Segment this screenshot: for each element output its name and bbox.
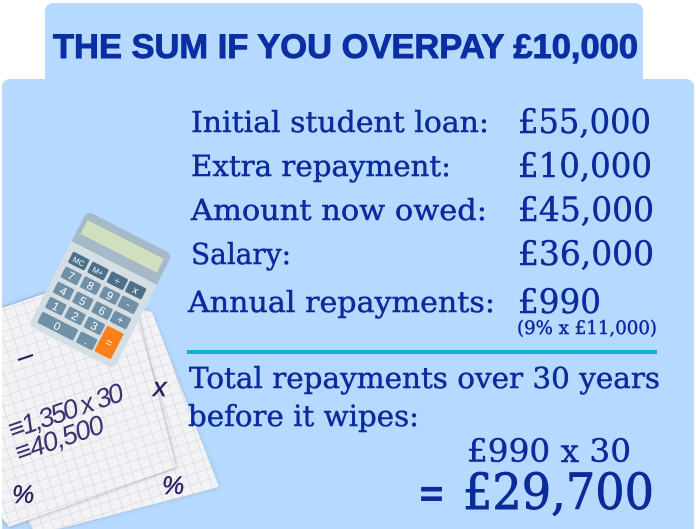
calculation: £990 x 30: [467, 432, 631, 470]
row: amount now owed: Amount now owed:: [190, 193, 487, 227]
handwritten sum line one: ≡1,350 x 30: [4, 377, 127, 445]
front sheet of graph paper: [2, 266, 176, 527]
row: salary: Salary:: [191, 237, 291, 271]
icon: calculator: ÷: [112, 276, 122, 288]
icon: calculator: 5: [77, 295, 88, 309]
row: annual repayments: £990: [518, 282, 601, 322]
icon: calculator: .: [82, 335, 91, 348]
icon: calculator: 6: [96, 305, 107, 318]
icon: calculator: =: [103, 337, 115, 350]
icon: calculator: 8: [85, 280, 96, 293]
total repayments text: [188, 361, 660, 433]
row: extra repayment: [191, 146, 652, 186]
row: initial student loan: [191, 102, 651, 142]
result: £29,700: [463, 463, 654, 521]
row: salary: £36,000: [518, 234, 654, 274]
icon: calculator: 3: [88, 320, 99, 334]
total repayments text: before it wipes:: [188, 399, 419, 433]
icon: calculator: 4: [58, 285, 69, 299]
icon: calculator: -: [124, 300, 132, 311]
icon: calculator: MC: [71, 255, 86, 269]
back sheet of graph paper: [28, 300, 219, 529]
handwritten minus sign: [18, 355, 33, 360]
handwritten percent back sheet: %: [162, 472, 184, 500]
row: annual repayments: (9% x £11,000): [517, 318, 657, 339]
row: initial student loan: £55,000: [518, 102, 651, 142]
row: annual repayments: Annual repayments:: [187, 285, 495, 319]
handwritten sum line two: ≡40,500: [11, 409, 108, 468]
row: extra repayment: £10,000: [518, 146, 652, 186]
handwritten multiply sign: x: [151, 372, 168, 402]
total repayments text: Total repayments over 30 years: [189, 361, 660, 395]
title: THE SUM IF YOU OVERPAY £10,000: [53, 28, 638, 66]
icon: calculator: 7: [65, 270, 76, 284]
icon: calculator: +: [115, 315, 125, 327]
result: =: [418, 465, 445, 521]
icon: calculator: M+: [91, 265, 105, 278]
background panel: title tab: [45, 3, 643, 93]
row: amount now owed: £45,000: [518, 190, 654, 230]
icon: calculator: 2: [69, 310, 80, 324]
handwritten percent front sheet: %: [12, 481, 34, 509]
row: annual repayments: [187, 282, 657, 339]
row: extra repayment: Extra repayment:: [191, 149, 451, 183]
icon: calculator: 0: [51, 320, 62, 334]
row: initial student loan: Initial student loan:: [191, 105, 489, 139]
icon: calculator: [29, 211, 172, 369]
row: amount now owed: [190, 190, 654, 230]
icon: calculator: 1: [50, 300, 61, 314]
illustration: graph paper sheets: [2, 266, 219, 529]
row: salary: [191, 234, 654, 274]
icon: calculator: 9: [104, 290, 115, 303]
icon: calculator: x: [130, 285, 141, 298]
